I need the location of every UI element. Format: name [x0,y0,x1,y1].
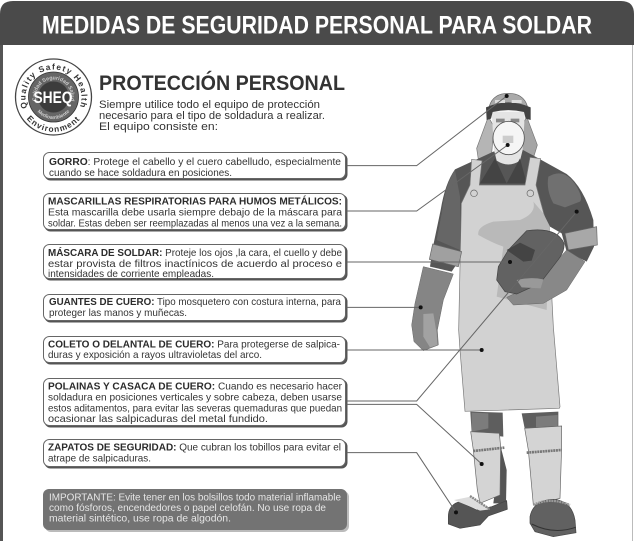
intro text [99,99,325,133]
panel: gorro: GORRO: Protege el cabello y el cuero cabelludo, especialmente [49,157,341,168]
icon: SHEQ logo: Environment [26,115,80,132]
leader line: polainas [347,404,484,466]
callout: importante: como fósforos, encendedores o papel celofán. No use ropa de [49,503,326,514]
callout: importante: IMPORTANTE: Evite tener en los bolsillos todo material inflamable [49,492,341,504]
right boot [530,499,576,537]
panel: coleto: duras y exposición a rayos ultravioletas del arco. [48,350,262,361]
panel: máscara de soldar [44,244,348,280]
panel: máscara de soldar: intensidades de corriente empleadas. [48,269,214,280]
panel: zapatos: atrape de salpicaduras. [48,454,151,464]
icon: SHEQ logo: Calidad Seguridad Salud [32,76,75,102]
sleeve shading [548,173,581,207]
panel: polainas: POLAINAS Y CASACA DE CUERO: Cuando es necesario hacer [48,382,343,392]
left glove [412,267,453,351]
cap [486,93,531,120]
panel: coleto [44,336,348,364]
panel: polainas: soldadura en posiciones verticales y sobre cabeza, deben usarse [48,392,342,404]
face [492,112,525,164]
collar [480,158,527,183]
trousers [470,412,558,437]
panel: polainas: ocasionar las salpicaduras del metal fundido. [48,414,268,425]
leader line: mascarilla [347,143,510,211]
panel: polainas [44,378,348,428]
panel: mascarillas: MASCARILLAS RESPIRATORIAS PARA HUMOS METÁLICOS: [48,194,342,208]
leader line: coleto [347,348,484,352]
callout: importante [43,489,349,532]
left gaiter [471,432,504,503]
icon: SHEQ logo: SHEQ [34,88,72,107]
intro text: necesario para el tipo de soldadura a realizar. [99,110,325,122]
panel: zapatos [44,440,348,468]
leader line: casaca [347,210,579,401]
panel: mascarillas [44,194,348,232]
panel: máscara de soldar: estar provista de filtros inactínicos de acuerdo al proceso e [48,259,342,270]
leader line: guantes [347,305,423,309]
heading: PROTECCIÓN PERSONAL [99,71,345,95]
callout: importante: material sintético, use ropa de algodón. [49,514,231,524]
icon: SHEQ logo: Quality Safety Health [20,64,88,108]
respirator mask [493,121,524,155]
eyes [496,119,519,122]
leader line: gorro [347,94,509,166]
leader line: máscara [347,260,512,264]
hood flaps [477,117,537,159]
intro text: El equipo consiste en: [99,121,218,133]
panel: polainas: estos aditamentos, para evitar las severas quemaduras que puedan [48,404,342,414]
left sleeve shading [437,170,460,250]
panel: guantes [44,294,348,322]
icon: SHEQ logo: Medioambiente [38,110,70,120]
leader line: zapatos [347,453,458,514]
icon: SHEQ logo [14,58,92,136]
right glove [507,250,585,305]
panel: guantes: proteger las manos y muñecas. [49,308,187,319]
panel: zapatos: ZAPATOS DE SEGURIDAD: Que cubran los tobillos para evitar el [48,442,341,454]
panel: coleto: COLETO O DELANTAL DE CUERO: Para protegerse de salpica- [48,340,340,350]
left cuff [429,244,462,267]
right gaiter [525,426,562,505]
panel: gorro: cuando se hace soldadura en posiciones. [49,168,232,179]
left boot [448,496,507,528]
apron [459,157,560,411]
panel: gorro [44,152,348,180]
panel: guantes: GUANTES DE CUERO: Tipo mosquetero con costura interna, para [49,297,341,308]
illustration: welder [347,93,597,537]
shirt [430,148,594,300]
panel: máscara de soldar: MÁSCARA DE SOLDAR: Proteje los ojos ,la cara, el cuello y debe [48,246,342,259]
panel: mascarillas: soldar. Estas deben ser reemplazadas al menos una vez a la semana. [48,218,342,230]
right cuff [565,227,597,250]
panel: mascarillas: Esta mascarilla debe usarla siempre debajo de la máscara para [48,208,342,218]
back of left boot [493,447,507,503]
welding helmet [497,230,564,294]
intro text: Siempre utilice todo el equipo de protección [99,99,320,111]
